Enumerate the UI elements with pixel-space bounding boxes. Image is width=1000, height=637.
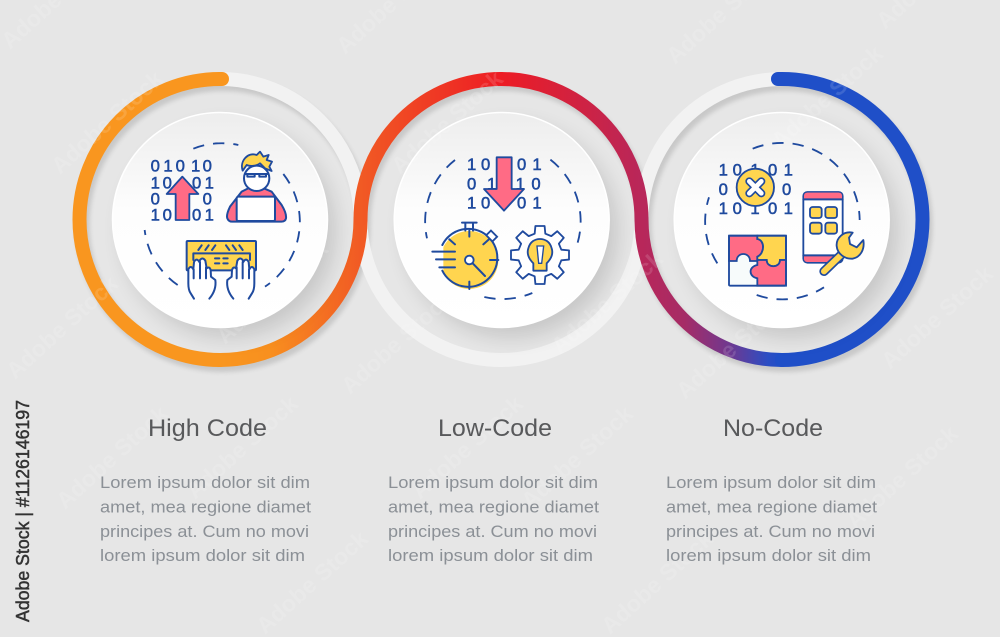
text block: no-code: Lorem ipsum dolor sit dim [666,473,876,492]
ring shadow [82,84,926,365]
watermarks: Adobe Stock [766,40,888,154]
watermarks: Adobe Stock [46,65,168,179]
watermarks: Adobe Stock [251,525,373,637]
text block: low-code [388,473,599,565]
panel: no-code disc [674,112,889,328]
heading: no-code: No-Code [723,415,823,442]
icon: low-code [425,155,581,299]
icon: high code: 00 [151,190,212,209]
text block: high code: Lorem ipsum dolor sit dim [100,473,310,492]
icon: low-code: 1001 [467,193,542,212]
watermarks: Adobe Stock [386,65,508,179]
text block: high code: principes at. Cum no movi [100,522,309,541]
icon: no-code: 10101 [719,199,793,218]
heading: low-code: Low-Code [438,415,552,442]
watermarks: Adobe Stock [876,260,998,374]
disc shadows [122,124,898,338]
panel: low-code disc [394,112,609,328]
text block: no-code: principes at. Cum no movi [666,522,875,541]
icon: no-code: 10101 [719,161,793,180]
icon: high code: 1001 [151,206,214,225]
text block: low-code: lorem ipsum dolor sit dim [388,546,593,565]
icon: no-code: 00 [719,180,791,199]
text block: no-code: amet, mea regione diamet [666,498,877,516]
stock id label: Adobe Stock | #1126146197 [13,400,33,622]
watermarks: Adobe Stock [181,390,303,504]
watermarks: Adobe Stock [1,270,123,384]
panel: high code disc [112,112,328,328]
watermarks: Adobe Stock [406,390,528,504]
icon: no-code [705,143,864,299]
text block: high code [100,473,311,565]
watermarks: Adobe Stock [546,245,668,359]
text block: low-code: Lorem ipsum dolor sit dim [388,473,598,492]
icon: high code: 1001 [151,173,214,192]
watermarks: Adobe Stock [596,525,718,637]
text block: no-code: lorem ipsum dolor sit dim [666,546,871,565]
icon: low-code: 0110 [467,174,541,193]
pale track of the ring [220,79,782,360]
icon: low-code: 1001 [467,155,542,174]
watermarks: Adobe Stock [51,400,173,514]
watermarks: Adobe Stock [671,290,793,404]
heading: high code: High Code [148,415,267,442]
icon: high code [145,143,300,299]
watermarks: Adobe Stock [516,400,638,514]
text block: high code: amet, mea regione diamet [100,498,311,516]
coloured flowing line [80,79,922,360]
watermarks: Adobe Stock [211,235,333,349]
text block: low-code: amet, mea regione diamet [388,498,599,516]
icon: high code: 01010 [151,157,212,176]
watermarks: Adobe Stock [841,420,963,534]
text block: low-code: principes at. Cum no movi [388,522,597,541]
text block: no-code [666,473,877,565]
text block: high code: lorem ipsum dolor sit dim [100,546,305,565]
watermarks: Adobe Stock [336,285,458,399]
